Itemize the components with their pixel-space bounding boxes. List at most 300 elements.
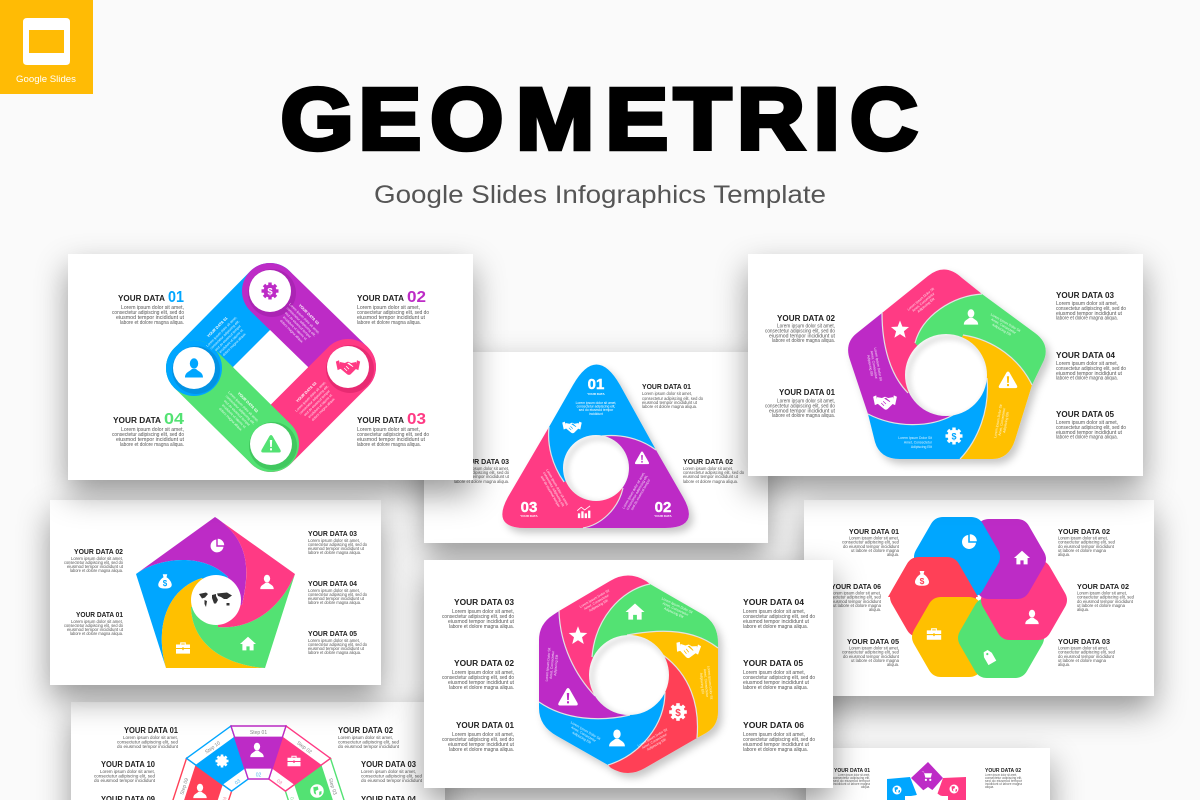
label: 01: Lorem ipsum dolor sit amet, [576,401,616,405]
text block: your data 04: Lorem ipsum dolor sit amet, [743,609,805,615]
text block: your data 02 middle: consectetur adipiscing elit, sed [1077,594,1135,600]
label: 02: YOUR DATA [654,514,673,518]
text block: your data 02: consectetur adipiscing elit, sed do [442,675,514,681]
rotated text: yellow: Lorem Ipsum Dolor Sit [707,666,713,700]
text block: your data 02: Lorem ipsum dolor sit amet, [357,305,420,311]
rotated text: yellow: Adipiscing Elit [1002,412,1010,433]
text block: your data 05: Lorem ipsum dolor sit amet, [743,670,805,676]
icon: cart [922,772,932,781]
text block: your data 01: Lorem ipsum dolor sit amet, [123,735,178,740]
hexagon: red [890,557,976,637]
text block: your data 01: labore et dolore magna aliqua. [70,631,123,636]
rotated text: purple: Adipiscing Elit [866,355,874,376]
seam lines [868,294,1032,459]
text block: your data 03: eiusmod tempor incididunt ut [357,437,426,443]
text block: your data 06: aliqua. [869,607,881,612]
label: 01: sed do eiusmod tempor [579,408,614,412]
text block: your data 02 middle: do eiusmod tempor incididunt [1077,599,1134,604]
rotated text: purple: Amet, Consectetur [870,351,879,380]
band text: purple: YOUR DATA 03 [298,303,320,325]
text block: your data 03 [448,457,510,484]
text block: your data 01: Lorem ipsum dolor sit amet, [452,732,514,738]
hexagon: blue [914,517,1000,597]
text block: your data 03: labore et dolore magna aliqua. [449,624,514,630]
text block: your data 05: YOUR DATA 05 [847,637,899,646]
text block: small your data 01: aliqua. [861,785,870,789]
text block: your data 04: labore et dolore magna aliqua. [1056,376,1118,382]
icon: house [240,637,256,650]
text block: your data 03: do eiusmod tempor incididunt [1058,654,1115,659]
text block: your data 03: Lorem ipsum dolor sit amet, [459,466,509,471]
text block: small your data 02: incididunt ut labore magna [985,782,1022,786]
text block: your data 03: consectetur adipiscing elit, sed do [308,542,368,547]
text block: small your data 01: incididunt ut labore magna [833,782,870,786]
text block: your data 04: Lorem ipsum dolor sit amet, [308,588,360,593]
sector: blue step 10 [187,726,262,800]
diamond chart [166,269,374,470]
text block: your data 04 [1056,350,1126,382]
text block: your data 06: Lorem ipsum dolor sit amet, [831,590,881,596]
text block: your data 02 [442,658,515,691]
pentagon chart: $ [951,432,957,442]
segment: blue [539,675,665,765]
text block: your data 03: consectetur adipiscing elit, sed do [442,614,514,620]
rotated text: yellow: Adipiscing Elit [699,673,705,694]
text block: your data 03: labore et dolore magna aliqua. [1056,316,1118,322]
text block: small your data 01: YOUR DATA 01 [834,768,870,774]
sector: purple step 01: 02 [256,773,261,779]
text block: your data 03 [308,529,368,555]
rotated text: blue [566,721,601,748]
segment: pink [502,427,623,528]
rotated text: purple: Adipiscing Elit [553,655,559,676]
icon: globe [310,784,324,798]
icon: gear [669,703,687,721]
text block: your data 04: consectetur adipiscing elit, sed do [308,592,368,597]
text block: your data 05: ut labore et dolore magna [851,658,900,663]
text block: your data 03: Lorem ipsum dolor sit amet, [452,609,514,615]
rotated text: yellow: Amet, Consectetur [998,407,1007,436]
icon: slides [23,18,70,65]
text block: your data 02 middle: Lorem ipsum dolor sit amet, [1077,590,1127,596]
center circle [191,575,241,625]
text block: your data 03: YOUR DATA 03 [361,759,416,769]
text block: your data 01: Lorem ipsum dolor sit amet, [849,536,899,540]
sector: green step 03: Step 03 [327,778,338,796]
rotated text: green [986,313,1021,340]
text block: your data 02 middle: YOUR DATA 02 [1077,582,1129,591]
rotated text: pink: Adipiscing Elit [917,297,935,314]
panel: decagon slide [71,702,445,800]
text block: your data 05: consectetur adipiscing elit, sed do [743,675,815,681]
text block: your data 10 [94,759,156,783]
text block: your data 05: consectetur adipiscing elit, sed [842,650,900,654]
segment: purple [848,313,953,425]
sector: blue step 10: Step 10 [204,740,222,755]
text block: your data 02 [683,457,745,484]
rotated text: purple: Lorem Ipsum Dolor Sit [545,648,551,682]
text: blue: Lorem Ipsum Dolor Sit [898,436,932,440]
text: blue: Amet, Consectetur [904,440,933,444]
text block: your data 10: consectetur adipiscing elit, sed [94,774,156,778]
text block: your data 01: consectetur adipiscing elit, sed do [765,404,835,410]
segment: green [592,584,718,675]
hexagon: pink [981,560,1067,640]
text: blue [898,436,933,449]
band text: green: incididunt ut labore et [221,403,247,429]
text block: your data 02: labore et dolore magna aliqua. [70,568,123,573]
text block: your data 01: YOUR DATA 01 [456,720,514,730]
text block: your data 04: eiusmod tempor incididunt ut [308,596,365,601]
text: blue: Adipiscing Elit [911,445,932,449]
text block: your data 03: YOUR DATA 03 [454,597,514,607]
text block: your data 06: YOUR DATA 06 [831,582,881,591]
text block: your data 05: eiusmod tempor incididunt ut [743,680,810,686]
center house shape [905,787,948,800]
hexagon chart [539,576,718,773]
text block: your data 01 [642,382,704,409]
hole inner shadow [908,337,990,419]
label: 01: consectetur adipiscing elit, [577,404,615,408]
text block: your data 03 [361,759,423,783]
text block: your data 01: Lorem ipsum dolor sit amet, [642,391,692,396]
text block: your data 05: Lorem ipsum dolor sit amet, [1056,420,1118,426]
text block: your data 02 top: consectetur adipiscing elit, sed [1058,540,1116,544]
text block: your data 05: consectetur adipiscing elit, sed do [308,642,368,647]
text block: your data 03: eiusmod tempor incididunt ut [1056,311,1123,317]
text block: your data 01 [112,289,185,326]
hexagon flower chart [888,517,1067,678]
text block: your data 05 [308,629,368,655]
sector: pink step 02: 03 [275,778,283,786]
rotated text: green: Adipiscing Elit [663,606,684,619]
text block: your data 04: YOUR DATA [113,415,161,425]
segment: blue [136,560,228,668]
text block: your data 03: ut labore et dolore magna [1058,658,1107,663]
icon: warning [999,371,1017,388]
icon: person [1025,610,1039,624]
text block: your data 01: do eiusmod tempor incididunt [843,544,900,549]
text block: your data 02: labore et dolore magna aliqua. [772,338,835,344]
sector: red step 09 [170,758,237,800]
icon: gear [216,754,228,768]
rotated text: red: Adipiscing Elit [646,738,667,752]
band text: blue: sed do eiusmod tempor [214,323,243,352]
text block: your data 03: eiusmod tempor incididunt ut [448,619,515,625]
text block: your data 02: eiusmod tempor incididunt ut [769,334,836,340]
rotated text: yellow [699,666,713,700]
text block: your data 05: eiusmod tempor incididunt ut [1056,430,1123,436]
text block: your data 02 top: Lorem ipsum dolor sit amet, [1058,536,1108,540]
label: 02: 02 [655,499,671,516]
hexagon: purple [960,519,1046,599]
text block: your data 02 [64,547,124,573]
rotated text: yellow: Amet, Consectetur [703,669,709,698]
text block: your data 05: Lorem ipsum dolor sit amet, [308,638,360,643]
rotated text: pink: Lorem Ipsum Dolor Sit [907,287,935,312]
text block: your data 03: YOUR DATA [357,415,404,425]
sector: pink step 02 [255,726,330,800]
text block: your data 02: consectetur adipiscing elit, sed do [683,470,745,475]
icon: gear [946,428,962,444]
text block: your data 05: Lorem ipsum dolor sit amet, [849,646,899,650]
shape shadow and segments [539,576,718,773]
text block: your data 02 middle: ut labore et dolore magna [1077,603,1126,608]
text block: your data 02 [357,289,429,326]
text block: your data 02: YOUR DATA 02 [74,547,123,556]
text block: small your data 01 [833,768,871,789]
text block: your data 03: consectetur adipiscing elit, sed [1058,650,1116,654]
hole inner shadow [592,638,672,718]
segment: purple [539,611,630,719]
text block: your data 04: consectetur adipiscing elit, sed do [743,614,815,620]
rotated text: purple [865,347,883,383]
text block: your data 04 [743,597,815,630]
label: 01: incididunt [589,412,603,416]
petal: purple [911,762,943,795]
panel: hexagon flower slide [804,500,1154,696]
band text: green: consectetur adipiscing elit, [225,394,256,425]
hexagon: green [958,598,1044,678]
text block: your data 02: YOUR DATA 02 [338,725,393,735]
text block: your data 03: consectetur adipiscing elit, sed do [357,432,429,438]
text block: your data 02: consectetur adipiscing elit, sed [338,740,400,744]
text block: your data 03: consectetur adipiscing elit, sed do [1056,306,1126,312]
text block: your data 01: labore et dolore magna aliqua. [642,404,697,409]
band text: green: YOUR DATA 03 [237,391,259,413]
badge: google slides [0,0,93,94]
text block: your data 03: labore et dolore magna aliqua. [308,550,361,555]
text block: small your data 02: sed do eiusmod tempor [985,779,1023,783]
rotated text: pink: Lorem Ipsum Dolor Sit [579,588,610,609]
rotated text: yellow: Lorem Ipsum Dolor Sit [993,404,1003,438]
text block: your data 05: YOUR DATA 05 [743,658,803,668]
text block: your data 02: YOUR DATA [357,293,404,303]
pentagon chart: $ [163,579,168,588]
text block: your data 01: eiusmod tempor incididunt ut [116,315,185,321]
band text: pink: YOUR DATA 03 [295,381,317,403]
seam lines [549,427,656,528]
rotated text: red: Lorem Ipsum Dolor Sit [637,727,668,748]
icon: briefcase [176,642,190,654]
hexagon chart: $ [675,708,681,719]
text block: small your data 01: sed do eiusmod tempor [833,779,871,783]
band text: pink: dolore magna aliqua. [311,397,336,422]
text block: your data 05: do eiusmod tempor incididunt [843,654,900,659]
text block: small your data 01: Lorem ipsum dolor sit amet, [838,773,870,777]
text block: your data 03: consectetur adipiscing elit, sed do [448,470,510,475]
text block: your data 04: labore et dolore magna aliqua. [120,442,184,448]
text block: your data 03 [357,411,429,448]
text block: your data 05: labore et dolore magna aliqua. [743,685,808,691]
text block: your data 02: YOUR DATA 02 [777,313,835,323]
text block: your data 03 [1056,290,1126,322]
title: GEOMETRIC [281,71,918,168]
rotated text: pink [907,287,940,318]
text block: your data 01: eiusmod tempor incididunt ut [769,408,836,414]
band text: blue: YOUR DATA 01 [206,316,228,338]
rotated text: yellow [993,404,1011,439]
text block: your data 02: consectetur adipiscing elit, sed do [357,310,429,316]
text block: your data 06: consectetur adipiscing elit, sed do [743,737,815,743]
icon: person [964,309,978,325]
text block: small your data 01: consectetur adipiscing elit, [833,776,870,780]
text block: your data 01: YOUR DATA 01 [642,382,691,391]
segment: purple [583,436,689,528]
text block: your data 03: labore et dolore magna aliqua. [357,442,421,448]
text block: your data 02: consectetur adipiscing elit, sed do [64,560,124,565]
band text: blue: dolore magna aliqua. [222,332,247,357]
seam lines [539,584,718,765]
hexagon flower chart: $ [920,576,925,586]
text block: your data 02: 02 [407,289,426,306]
text block: your data 01: labore et dolore magna aliqua. [772,413,835,419]
sector: pink step 02: Step 02 [295,740,313,756]
text block: your data 01: YOUR DATA 01 [124,725,178,735]
icon: house [626,603,644,620]
icon: warning [558,688,578,706]
petal chart [887,762,966,800]
text block: your data 05: consectetur adipiscing elit, sed do [1056,425,1126,431]
rotated text: blue: Lorem Ipsum Dolor Sit [570,721,601,741]
rotated text: red: Amet, Consectetur [641,732,668,750]
text block: your data 02 middle: aliqua. [1077,607,1089,612]
text block: your data 05 [1056,409,1126,440]
band text: blue [201,311,251,361]
rotated text: purple: consectetur adipiscing elit, [625,474,649,511]
segment: purple [136,517,246,605]
icon: world map [199,592,232,607]
text block: your data 02: Lorem ipsum dolor sit amet, [71,556,123,561]
text block: your data 03: aliqua. [1058,662,1070,667]
text block: your data 01: 01 [168,289,184,306]
text block: your data 04: eiusmod tempor incididunt ut [1056,371,1123,377]
rotated text: pink: Lorem ipsum dolor sit amet, [545,468,570,507]
rotated text: purple: Lorem Ipsum Dolor Sit [873,347,883,381]
text block: your data 02 [765,313,836,344]
hexagon: red upper overlap [888,557,978,597]
text block: your data 02: eiusmod tempor incididunt ut [67,564,124,569]
text block: your data 02 top: aliqua. [1058,552,1070,557]
icon: star [891,320,909,338]
icon: briefcase [927,628,941,640]
text block: your data 01 [442,720,515,753]
pentagon chart [136,517,295,668]
band text: green: dolore magna aliqua. [218,407,243,432]
band text: pink: sed do eiusmod tempor [303,388,332,417]
text block: your data 06: do eiusmod tempor incididunt [825,599,882,604]
label: 01 [576,376,616,416]
text block: your data 01: eiusmod tempor incididunt ut [67,627,124,632]
segment: pink [559,576,650,696]
text block: your data 03: 03 [407,411,426,428]
band text: pink [290,376,340,426]
text block: your data 04: labore et dolore magna aliqua. [743,624,808,630]
segment: red [608,655,698,773]
node: gear [248,269,296,317]
rotated text: pink: consectetur adipiscing elit, [542,471,566,508]
text block: your data 01 [765,387,836,419]
sector: blue step 10: 03 [234,778,242,786]
text block: your data 01: consectetur adipiscing elit, sed do [442,737,514,743]
band text: green [214,386,264,436]
rotated text: green: Amet, Consectetur [662,601,690,617]
shape shadow and segments [502,364,689,528]
band text: blue: Lorem ipsum dolor sit amet, [205,315,238,348]
text block: your data 03 [1058,637,1116,667]
text block: your data 04: eiusmod tempor incididunt ut [116,437,185,443]
text block: your data 02: labore et dolore magna aliqua. [357,320,421,326]
text block: your data 01: Lorem ipsum dolor sit amet, [777,398,835,404]
panel: sharp pentagon slide [50,500,381,685]
text block: your data 02: eiusmod tempor incididunt ut [683,474,739,479]
icon: chart [577,506,590,518]
text block: your data 02: Lorem ipsum dolor sit amet, [683,466,733,471]
rotated text: pink: Amet, Consectetur [583,593,610,611]
text block: your data 04: labore et dolore magna aliqua. [308,600,361,605]
text block: your data 06: consectetur adipiscing elit, sed [824,594,882,600]
band text: purple: consectetur adipiscing elit, [286,306,317,337]
text block: your data 10: do eiusmod tempor incididunt [94,778,156,783]
text block: small your data 02: YOUR DATA 02 [985,768,1021,774]
text block: your data 03: eiusmod tempor incididunt ut [308,546,365,551]
band text: green: sed do eiusmod tempor [223,399,252,428]
text block: your data 04: 04 [164,411,184,428]
text block: small your data 02: consectetur adipiscing elit, [985,776,1022,780]
segment: yellow [162,578,265,668]
label: 03: 03 [521,499,537,516]
segment: pink [882,269,982,393]
text block: your data 03 [442,597,515,630]
segment: green [915,294,1046,385]
icon: handshake [562,422,582,433]
label: 03: YOUR DATA [520,514,539,518]
text block: your data 03: Lorem ipsum dolor sit amet, [361,769,416,774]
text block: your data 04: Lorem ipsum dolor sit amet, [121,427,184,433]
band: blue [194,291,270,368]
text block: your data 04: YOUR DATA 04 [308,579,357,588]
rotated text: green: Lorem Ipsum Dolor Sit [661,597,693,614]
panel: triangle slide [424,352,768,543]
text block: your data 01: labore et dolore magna aliqua. [120,320,184,326]
text block: your data 06: Lorem ipsum dolor sit amet, [743,732,805,738]
panel: rounded pentagon slide [748,254,1143,476]
text block: your data 01: eiusmod tempor incididunt ut [642,400,698,405]
text block: small your data 02 [985,768,1023,789]
segment: yellow [946,335,1032,459]
band cap: blue [166,340,222,396]
text block: your data 01: YOUR DATA [118,293,165,303]
band: green [194,368,271,444]
text block: small your data 02: aliqua. [985,785,994,789]
text block: your data 05: labore et dolore magna aliqua. [1056,434,1118,440]
rotated text: green: Adipiscing Elit [991,323,1012,337]
text block: your data 03: Lorem ipsum dolor sit amet, [1056,301,1118,307]
text block: your data 01 [842,527,900,557]
text block: your data 03: YOUR DATA 03 [1056,290,1114,300]
text block: your data 01: ut labore et dolore magna [851,548,900,553]
badge label: Google Slides [16,74,77,84]
text block: your data 10: Lorem ipsum dolor sit amet, [100,769,155,774]
node: handshake [326,345,374,393]
center square [233,330,308,404]
rotated text: pink [579,588,614,616]
text block: your data 02 top: ut labore et dolore magna [1058,548,1107,553]
text block: your data 03: do eiusmod tempor incididunt [361,778,423,783]
text block: your data 02 top: do eiusmod tempor incididunt [1058,544,1115,549]
band text: purple: Lorem ipsum dolor sit amet, [288,302,321,335]
text block: your data 04: YOUR DATA 04 [743,597,804,607]
